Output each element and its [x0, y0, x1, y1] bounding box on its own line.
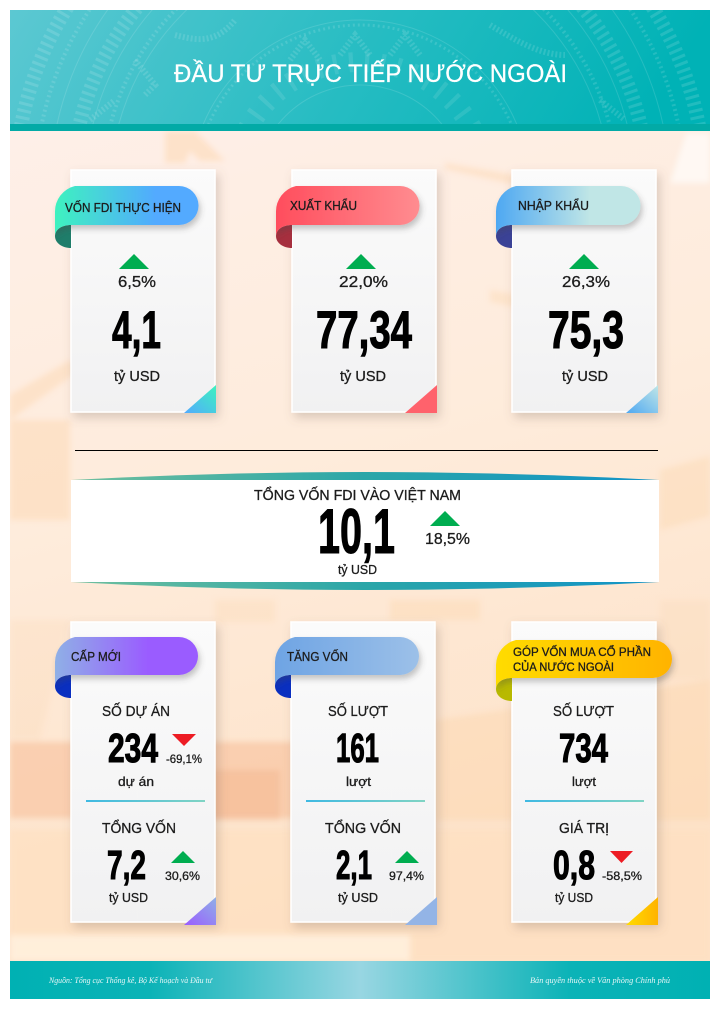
icon: up arrow	[119, 254, 149, 269]
ribbon: CẤP MỚI	[71, 649, 121, 664]
ribbon: GÓP VỐN MUA CỔ PHẦN	[513, 644, 651, 659]
panel: xuất khẩu	[276, 170, 437, 413]
corner fold	[405, 385, 437, 413]
ribbon	[275, 637, 419, 698]
panel: tăng vốn	[275, 622, 437, 925]
ribbon: CỦA NƯỚC NGOÀI	[513, 659, 614, 674]
header banner	[10, 10, 710, 131]
change: 18,5%	[425, 531, 470, 548]
change: -58,5%	[602, 869, 642, 883]
value: 4,1	[112, 301, 161, 360]
value: 75,3	[548, 301, 624, 360]
corner fold	[184, 385, 216, 413]
ribbon: XUẤT KHẨU	[290, 198, 357, 213]
ribbon	[276, 186, 420, 248]
unit: tỷ USD	[562, 368, 608, 385]
label: SỐ LƯỢT	[553, 702, 614, 720]
value: 77,34	[316, 301, 412, 360]
unit: lượt	[572, 774, 596, 789]
ribbon	[496, 186, 640, 248]
change: 6,5%	[118, 274, 156, 291]
label: SỐ LƯỢT	[328, 702, 388, 720]
value: 734	[559, 725, 608, 771]
icon: down arrow	[610, 851, 633, 863]
icon: up arrow	[430, 511, 460, 526]
value: 0,8	[553, 842, 595, 888]
value: 7,2	[107, 842, 146, 888]
icon: up arrow	[171, 851, 195, 863]
unit: tỷ USD	[338, 890, 378, 905]
unit: dự án	[118, 774, 154, 789]
icon: down arrow	[172, 734, 196, 746]
label: TỔNG VỐN	[102, 819, 176, 837]
unit: tỷ USD	[555, 890, 593, 905]
icon: up arrow	[395, 851, 419, 863]
change: 97,4%	[389, 869, 424, 883]
icon: up arrow	[569, 254, 599, 269]
unit: lượt	[346, 774, 371, 789]
title: ĐẦU TƯ TRỰC TIẾP NƯỚC NGOÀI	[174, 59, 567, 88]
change: -69,1%	[166, 752, 202, 766]
corner fold	[405, 897, 437, 925]
unit: tỷ USD	[109, 890, 148, 905]
panel: nhập khẩu	[496, 170, 658, 413]
ribbon: VỐN FDI THỰC HIỆN	[65, 200, 181, 215]
source: Nguồn: Tổng cục Thống kê, Bộ Kế hoạch và Đầu tư	[48, 975, 213, 985]
corner fold	[626, 385, 658, 413]
panel: vốn FDI thực hiện	[55, 170, 216, 413]
panel: cấp mới	[55, 622, 216, 925]
change: 26,3%	[562, 274, 610, 291]
value: 10,1	[318, 497, 395, 567]
footer bar	[10, 961, 710, 999]
panel: góp vốn mua cổ phần	[496, 622, 672, 925]
panel: tổng vốn FDI	[71, 472, 659, 590]
label: TỔNG VỐN	[325, 819, 401, 837]
unit: tỷ USD	[114, 368, 160, 385]
ribbon: NHẬP KHẨU	[518, 198, 589, 213]
value: 234	[108, 725, 158, 771]
ribbon	[55, 186, 199, 248]
ribbon	[496, 640, 672, 701]
change: 22,0%	[339, 274, 388, 291]
corner fold	[184, 897, 216, 925]
ribbon	[55, 637, 198, 698]
corner fold	[626, 897, 658, 925]
ribbon: TĂNG VỐN	[287, 649, 348, 664]
unit: tỷ USD	[338, 562, 377, 577]
unit: tỷ USD	[340, 368, 386, 385]
icon: up arrow	[346, 254, 376, 269]
value: 161	[336, 725, 379, 771]
change: 30,6%	[165, 869, 200, 883]
label: GIÁ TRỊ	[559, 820, 609, 837]
copyright: Bản quyền thuộc về Văn phòng Chính phủ	[530, 975, 670, 985]
heading: TỔNG VỐN FDI VÀO VIỆT NAM	[254, 486, 461, 504]
value: 2,1	[336, 842, 372, 888]
label: SỐ DỰ ÁN	[102, 702, 170, 720]
